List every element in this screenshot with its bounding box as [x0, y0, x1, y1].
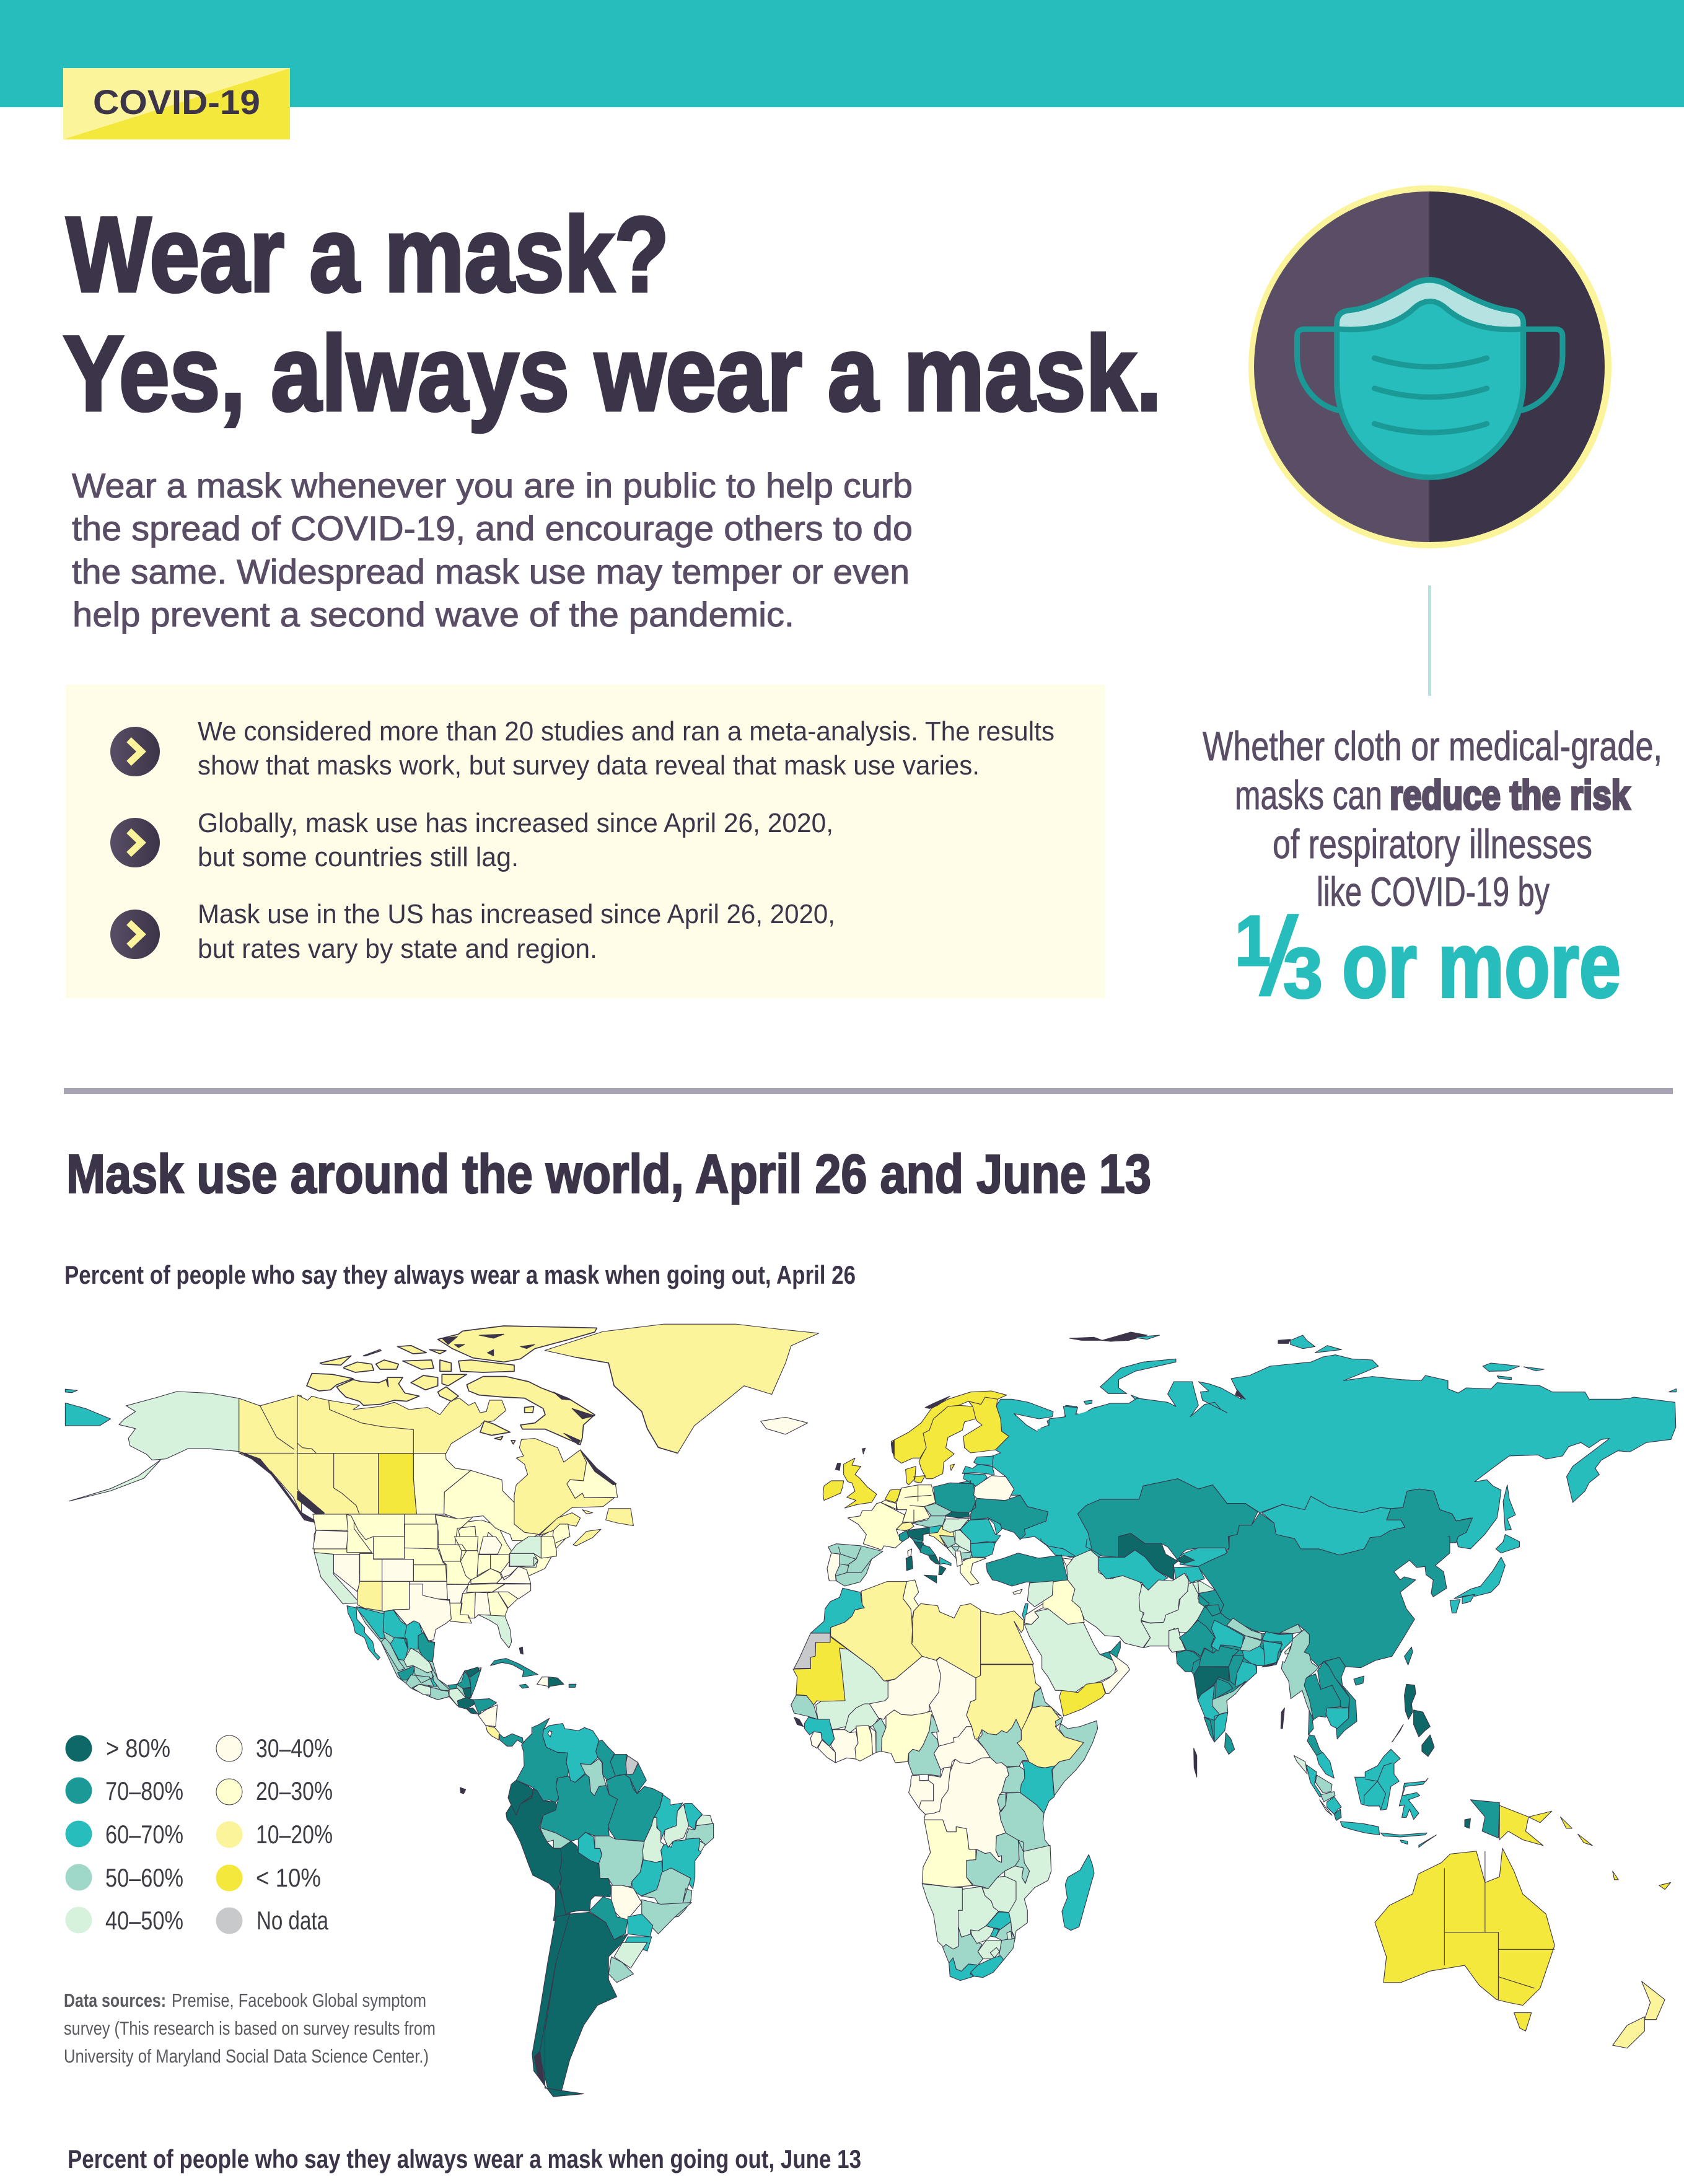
- tag: COVID-19: COVID-19: [93, 82, 260, 121]
- key point 1: [198, 716, 1055, 781]
- legend item: 50–60%: 50–60%: [105, 1863, 183, 1892]
- callout: reduce the risk: reduce the risk: [1390, 772, 1630, 818]
- map region: Russia: [993, 1332, 1676, 1613]
- world map: April 26: [65, 1324, 1676, 2097]
- legend item: > 80%: [66, 1734, 170, 1763]
- data sources note: [64, 1989, 436, 2067]
- legend item: 50–60%: [66, 1863, 183, 1892]
- map subtitle: April 26: Percent of people who say they always wear a mask when going out, April 26: [64, 1260, 856, 1289]
- legend item: 30–40%: 30–40%: [256, 1734, 333, 1763]
- icon: chevron bullet 2: [110, 818, 160, 867]
- map region: Oceania: [1375, 1800, 1670, 2048]
- legend item: 40–50%: 40–50%: [105, 1906, 183, 1935]
- legend item: < 10%: [216, 1863, 321, 1892]
- legend item: No data: No data: [257, 1906, 329, 1935]
- legend item: 10–20%: 10–20%: [256, 1820, 333, 1849]
- icon: mask in circle: [1248, 185, 1612, 548]
- legend item: No data: [216, 1906, 329, 1935]
- key point 2: but some countries still lag.: [198, 842, 519, 872]
- data sources note: Premise, Facebook Global symptom: [172, 1989, 426, 2011]
- legend item: 30–40%: [216, 1734, 333, 1763]
- top banner: [0, 0, 1684, 107]
- legend item: > 80%: > 80%: [106, 1734, 170, 1763]
- map subtitle: June 13: Percent of people who say they always wear a mask when going out, June 13: [68, 2144, 861, 2173]
- intro paragraph: the same. Widespread mask use may temper or even: [72, 552, 910, 591]
- intro paragraph: help prevent a second wave of the pandemic.: [72, 595, 794, 634]
- title: [63, 195, 1162, 433]
- intro paragraph: [72, 466, 913, 634]
- map region: Central Asia and Mongolia: [1077, 1479, 1405, 1590]
- legend item: 20–30%: 20–30%: [256, 1776, 333, 1805]
- legend item: 60–70%: [66, 1820, 183, 1849]
- key point 3: Mask use in the US has increased since April 26, 2020,: [198, 899, 835, 929]
- map region: Europe, North Africa, Middle East: [794, 1391, 1151, 1693]
- callout: reduce the risk: of respiratory illnesses: [1273, 821, 1592, 867]
- key point 2: Globally, mask use has increased since April 26, 2020,: [198, 808, 833, 838]
- title: Wear a mask?: [66, 195, 669, 314]
- key point 1: We considered more than 20 studies and ran a meta-analysis. The results: [198, 716, 1055, 747]
- legend item: 70–80%: 70–80%: [105, 1776, 183, 1805]
- stat: one third or more: /: [1259, 895, 1299, 1019]
- legend item: 70–80%: [66, 1776, 183, 1805]
- intro paragraph: the spread of COVID-19, and encourage others to do: [72, 509, 913, 548]
- data sources note: survey (This research is based on survey results from: [64, 2017, 436, 2039]
- key point 3: but rates vary by state and region.: [198, 934, 597, 964]
- map region: South America north: [506, 1718, 714, 1921]
- legend: [66, 1734, 333, 1935]
- callout: reduce the risk: like COVID-19 by: [1317, 869, 1550, 914]
- legend item: 60–70%: 60–70%: [105, 1820, 183, 1849]
- map region: southern US, Mexico, Central America: [347, 1524, 576, 1794]
- data sources note: University of Maryland Social Data Science Center.): [64, 2045, 429, 2067]
- divider: [64, 1088, 1673, 1094]
- legend item: 10–20%: [216, 1820, 333, 1849]
- map region: Africa: [791, 1637, 1129, 1981]
- data sources note: Data sources:: [64, 1989, 166, 2011]
- callout: reduce the risk: [1203, 723, 1662, 914]
- map region: Canada: [294, 1326, 618, 1549]
- vertical connector: [1428, 585, 1431, 696]
- map region: South and Southeast Asia: [1139, 1573, 1436, 1848]
- key point 2: [198, 808, 833, 872]
- intro paragraph: Wear a mask whenever you are in public to help curb: [72, 466, 913, 505]
- stat: one third or more: 3: [1283, 934, 1323, 1013]
- legend item: < 10%: < 10%: [256, 1863, 321, 1892]
- stat: one third or more: [1235, 895, 1621, 1019]
- stat: one third or more: 1: [1235, 901, 1271, 981]
- map region: South America south: [532, 1885, 691, 2097]
- key point 1: show that masks work, but survey data reveal that mask use varies.: [198, 750, 980, 781]
- callout: reduce the risk: masks can: [1235, 772, 1382, 818]
- panel: key points: [66, 685, 1105, 998]
- legend item: 20–30%: [216, 1776, 333, 1805]
- stat: one third or more: or more: [1342, 913, 1621, 1017]
- title: Yes, always wear a mask.: [63, 314, 1162, 433]
- map region: Alaska, Greenland, Iceland, northern US base: [65, 1324, 818, 1604]
- legend item: 40–50%: [66, 1906, 183, 1935]
- map region: China and Korea: [1198, 1489, 1473, 1668]
- icon: chevron bullet 3: [110, 910, 160, 959]
- icon: chevron bullet 1: [110, 727, 160, 776]
- tag: COVID-19: [63, 68, 290, 139]
- section heading: Mask use around the world, April 26 and June 13: [66, 1143, 1151, 1204]
- key point 3: [198, 899, 835, 964]
